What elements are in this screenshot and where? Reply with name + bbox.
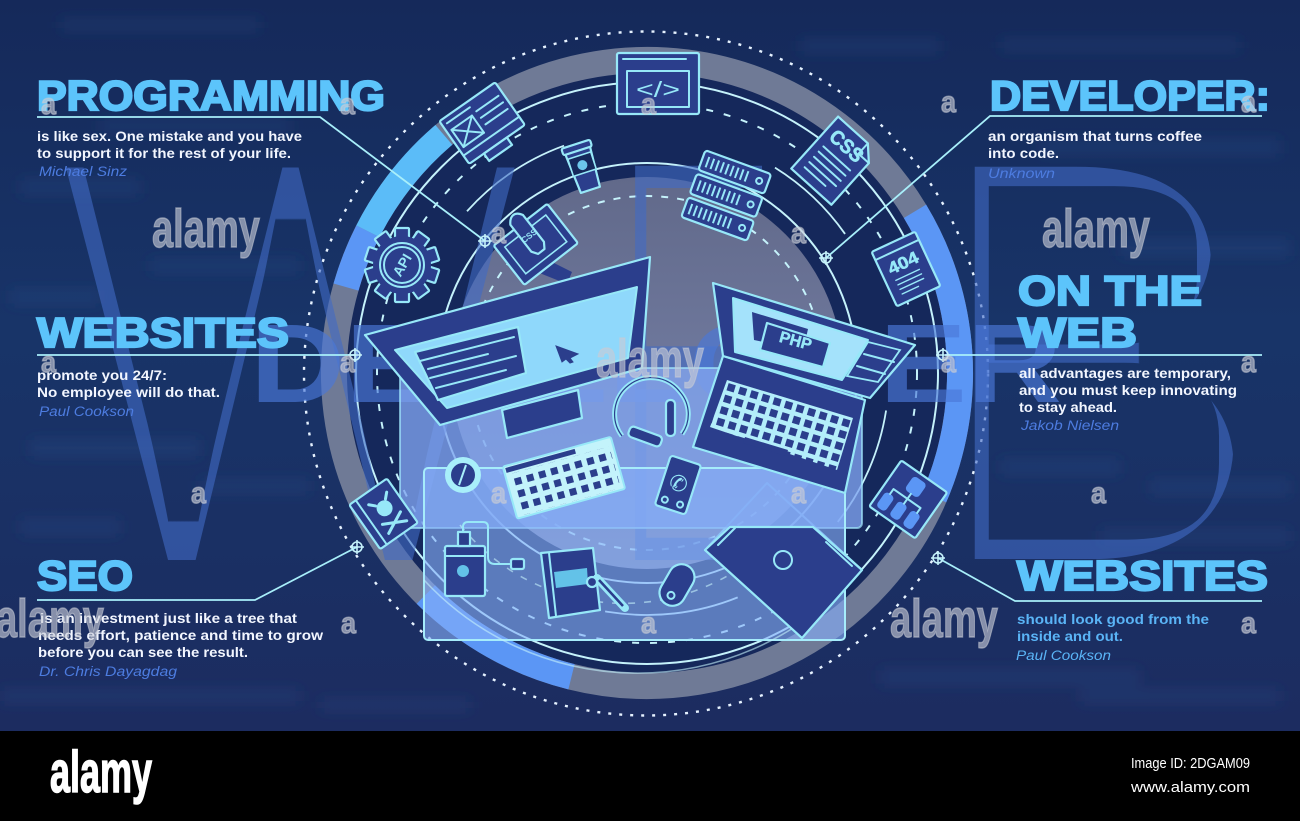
heading: developer: DEVELOPER: xyxy=(990,72,1270,119)
quote text: into code. xyxy=(988,146,1059,161)
dark inner band xyxy=(345,71,949,675)
icon: mouse xyxy=(655,559,699,611)
monitor screen xyxy=(395,287,637,408)
quote text: should look good from the xyxy=(1017,612,1210,627)
watermarks: a xyxy=(791,477,806,510)
monitor body xyxy=(365,257,650,425)
author: Dr. Chris Dayagdag xyxy=(39,664,178,679)
quote text: to stay ahead. xyxy=(1019,400,1117,415)
watermarks: a xyxy=(791,217,806,250)
footer logo: alamy xyxy=(50,740,152,805)
icon: 404 card xyxy=(872,232,940,306)
watermarks: a xyxy=(340,88,355,121)
watermarks: a xyxy=(641,88,656,121)
icon: CSS file xyxy=(791,117,878,205)
author: Paul Cookson xyxy=(1016,648,1111,663)
watermarks: a xyxy=(941,86,956,119)
watermarks: a xyxy=(191,477,206,510)
quote text: before you can see the result. xyxy=(38,645,248,660)
heading: programming: PROGRAMMING xyxy=(37,72,385,119)
icon: hierarchy card xyxy=(869,460,947,538)
monitor stand xyxy=(502,390,582,438)
icon: code window xyxy=(617,53,699,114)
footer bar xyxy=(0,731,1300,821)
PHP panel xyxy=(760,323,830,367)
quote text: to support it for the rest of your life. xyxy=(37,146,291,161)
quote text xyxy=(988,129,1203,161)
laptop lid xyxy=(713,283,915,398)
panel: websites left xyxy=(37,309,289,419)
author: Michael Sinz xyxy=(39,164,127,179)
icon: 404 card: 404 xyxy=(885,247,922,278)
watermarks: a xyxy=(1241,607,1256,640)
author: Paul Cookson xyxy=(39,404,134,419)
grey inner disc xyxy=(451,177,843,569)
laptop screen xyxy=(733,298,868,380)
watermarks: a xyxy=(41,88,56,121)
icon: notebook and pen xyxy=(541,548,625,618)
icon: laptop: PHP xyxy=(777,329,814,354)
icon: coffee cup xyxy=(561,140,605,194)
dark window xyxy=(752,312,808,343)
watermarks: a xyxy=(641,607,656,640)
icon: cup lid xyxy=(445,457,481,493)
quote text xyxy=(1017,612,1210,644)
quote text: all advantages are temporary, xyxy=(1019,366,1231,381)
quote text: No employee will do that. xyxy=(37,385,220,400)
icon: closed laptop outline xyxy=(705,483,862,638)
watermarks: alamy xyxy=(152,199,260,259)
mouse cursor xyxy=(556,346,578,363)
quote text: promote you 24/7: xyxy=(37,368,167,383)
icon: wireframe monitor xyxy=(439,82,530,171)
quote text: and you must keep innovating xyxy=(1019,383,1237,398)
image id: Image ID: 2DGAM09 xyxy=(1131,756,1250,772)
watermarks: alamy xyxy=(890,589,998,649)
website: www.alamy.com xyxy=(1130,780,1250,796)
watermarks xyxy=(0,86,1256,649)
quote text: needs effort, patience and time to grow xyxy=(38,628,324,643)
watermarks: alamy xyxy=(1042,199,1150,259)
icon: browser with rocket: CSS xyxy=(519,226,539,245)
icon: API gear xyxy=(365,228,439,302)
icon: skull card xyxy=(349,479,418,549)
background word: WEB: W xyxy=(46,35,539,689)
heading: seo: SEO xyxy=(37,552,133,599)
icon: server stack xyxy=(681,150,771,241)
laptop keys xyxy=(710,380,853,470)
upper desk panel xyxy=(400,368,862,528)
author: Jakob Nielsen xyxy=(1020,418,1119,433)
quote text: inside and out. xyxy=(1017,629,1123,644)
panel: on the web xyxy=(1018,267,1237,433)
connector nodes xyxy=(348,234,950,565)
watermarks: a xyxy=(41,346,56,379)
icon: CSS file: CSS xyxy=(825,126,868,168)
watermarks: a xyxy=(1241,86,1256,119)
watermarks: a xyxy=(1241,346,1256,379)
thick segmented ring xyxy=(217,0,1077,803)
heading: websites: WEBSITES xyxy=(37,309,289,356)
connector lines xyxy=(37,116,1262,601)
icon: smartphone: ✆ xyxy=(666,470,691,499)
watermarks: alamy xyxy=(0,589,104,649)
watermarks: a xyxy=(941,346,956,379)
panel: programming xyxy=(37,72,385,179)
heading: websites: WEBSITES xyxy=(1017,552,1268,599)
heading: on the web: ON THE xyxy=(1018,267,1202,314)
faint arcs across desk xyxy=(424,525,845,673)
panel: seo xyxy=(37,552,324,679)
watermarks: a xyxy=(491,477,506,510)
thin rings xyxy=(356,82,938,664)
watermarks: a xyxy=(341,607,356,640)
quote text: is like sex. One mistake and you have xyxy=(37,129,303,144)
circular ring diagram xyxy=(217,0,1077,803)
icon: API gear: API xyxy=(389,251,415,279)
laptop base xyxy=(693,356,865,493)
icon: headset xyxy=(615,378,688,448)
outer dotted ring xyxy=(304,32,988,716)
watermarks: a xyxy=(1091,477,1106,510)
watermarks: a xyxy=(340,346,355,379)
laptop space bar xyxy=(743,437,788,456)
panel: websites right xyxy=(1016,552,1268,663)
background word: WEB xyxy=(46,22,1282,701)
quote text: is an investment just like a tree that xyxy=(40,611,298,626)
background word: DEVELOPER: DEVELOPER xyxy=(250,301,1062,426)
author: Unknown xyxy=(988,166,1055,181)
quote text xyxy=(37,368,220,400)
heading: on the web: WEB xyxy=(1018,309,1137,356)
background word: WEB: E xyxy=(606,22,786,701)
quote text xyxy=(37,129,303,161)
icon: external drive with cable xyxy=(445,522,524,596)
lower desk panel xyxy=(424,468,845,640)
watermarks: a xyxy=(491,217,506,250)
icon: closed laptop xyxy=(705,527,862,638)
side panel xyxy=(847,342,900,382)
quote text xyxy=(1019,366,1237,415)
quote text xyxy=(38,611,324,660)
desk panels xyxy=(400,368,862,640)
icon: desktop monitor xyxy=(365,257,650,438)
icon: browser with rocket xyxy=(486,194,578,285)
icon: laptop xyxy=(693,283,915,493)
panel: developer xyxy=(988,72,1270,181)
window on screen xyxy=(415,327,526,400)
icon: keyboard xyxy=(503,437,625,519)
quote text: an organism that turns coffee xyxy=(988,129,1203,144)
watermarks: alamy xyxy=(596,329,704,389)
icon: smartphone xyxy=(655,455,701,515)
icon: code window: </> xyxy=(636,77,680,102)
heading: on the web xyxy=(1018,267,1202,356)
